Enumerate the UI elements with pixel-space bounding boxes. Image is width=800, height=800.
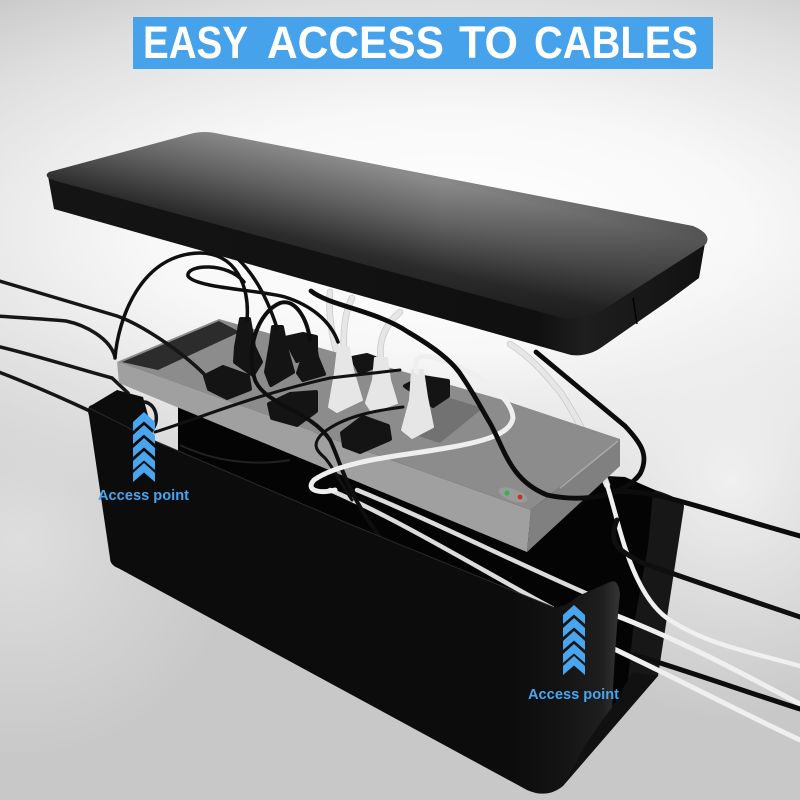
white cables rear xyxy=(329,292,607,485)
second black loop xyxy=(188,267,338,342)
white cable middle xyxy=(612,614,800,704)
black cable lower xyxy=(635,655,800,709)
box right side panel xyxy=(612,490,684,707)
black cable upper right xyxy=(612,491,800,536)
big black loop xyxy=(115,253,247,358)
black crossing cable xyxy=(155,370,400,432)
lid top surface xyxy=(47,132,707,319)
lid notch xyxy=(633,298,637,324)
title words: CABLES xyxy=(534,17,698,68)
box front panel xyxy=(88,390,620,794)
white cables under strip xyxy=(330,490,590,608)
plug rear pads xyxy=(285,334,375,373)
strip end face xyxy=(527,439,620,552)
title banner xyxy=(133,17,713,69)
white cable lower xyxy=(612,648,800,740)
strip front face xyxy=(117,362,531,552)
lid shading right xyxy=(47,132,707,319)
indicator lights xyxy=(497,484,529,506)
black cable rear plugs xyxy=(316,407,403,500)
strip seam right xyxy=(560,441,618,488)
strip top face xyxy=(117,319,620,510)
long black cable loop xyxy=(311,291,644,498)
access point left: Access point xyxy=(98,487,189,504)
left cable to plug xyxy=(0,280,204,374)
lid side rim xyxy=(48,176,705,355)
title words: TO xyxy=(459,17,518,68)
title words: EASY xyxy=(143,17,248,68)
strip dark section xyxy=(400,395,483,443)
cable dark loop inside box xyxy=(180,445,290,463)
title words: ACCESS xyxy=(267,17,444,68)
white loop cable xyxy=(311,356,513,492)
access point right xyxy=(528,605,619,703)
icon: up chevrons right xyxy=(563,605,585,675)
white cable right xyxy=(607,485,800,666)
cables left rear xyxy=(0,316,156,432)
front panel top rim xyxy=(89,408,553,607)
black s-curve cable xyxy=(252,302,380,537)
title words xyxy=(143,17,698,68)
black cable right xyxy=(614,520,800,617)
right slot opening xyxy=(612,490,653,707)
lower right wrap of box xyxy=(540,672,658,786)
access point left xyxy=(98,412,189,504)
box rear interior xyxy=(178,405,684,690)
power strip xyxy=(117,319,620,552)
black plugs xyxy=(205,319,448,452)
cables over strip xyxy=(0,253,800,740)
strip switch pad xyxy=(122,321,240,370)
lid xyxy=(47,132,707,355)
third black cable xyxy=(237,258,277,328)
white plugs xyxy=(329,347,433,438)
icon: up chevrons left xyxy=(133,412,155,482)
access point right: Access point xyxy=(528,686,619,703)
